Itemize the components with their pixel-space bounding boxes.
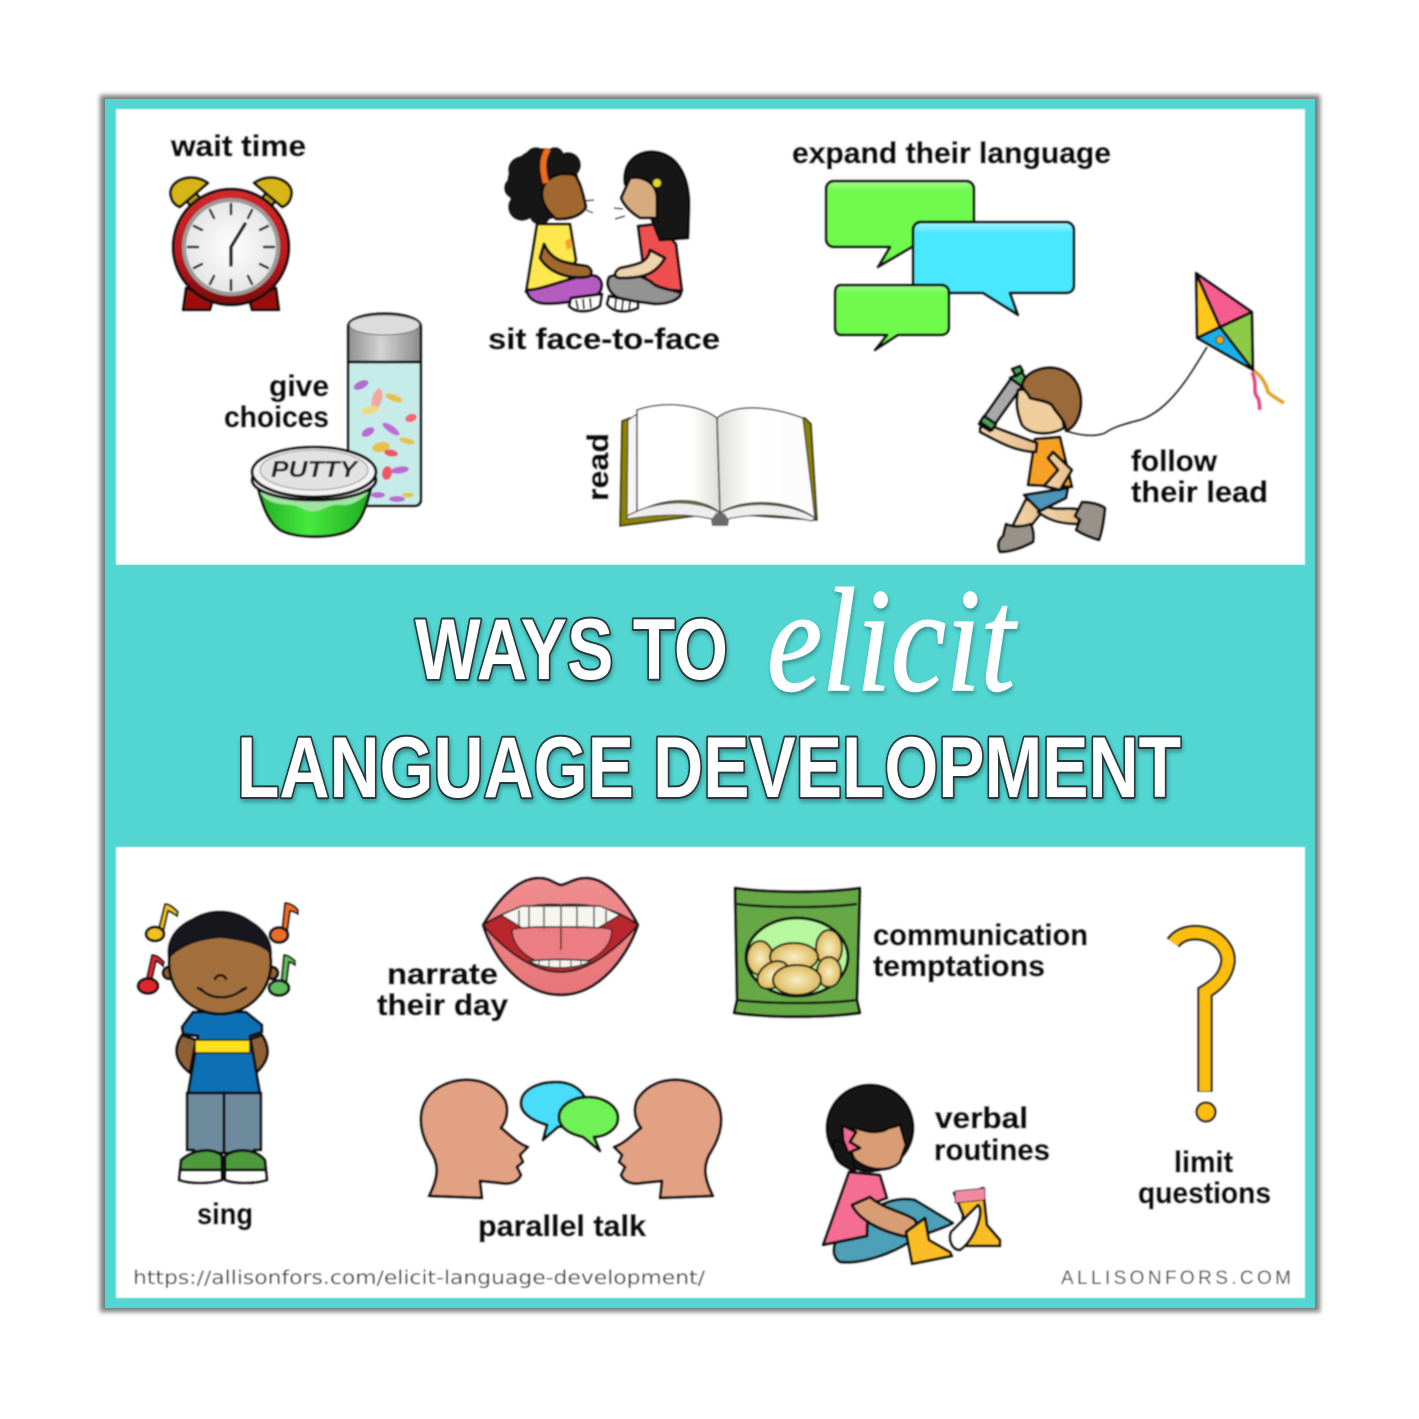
label: wait time: wait time — [170, 130, 306, 163]
label: limit questions: limit — [1174, 1146, 1233, 1179]
icon: bag of chips — [734, 888, 860, 1017]
icon: two girls sitting face to face — [504, 147, 689, 311]
icon: girl putting on boots — [823, 1085, 1000, 1264]
icon: putty tub — [252, 447, 376, 537]
title line: Ways to: WAYS TO — [415, 602, 728, 698]
label: narrate their day: narrate — [387, 958, 498, 991]
icon: kite — [1196, 273, 1284, 410]
panel: top strategies — [116, 109, 1305, 565]
page frame — [100, 95, 1320, 1312]
right girl — [607, 152, 689, 311]
label: communication temptations: communication — [873, 919, 1088, 952]
label: parallel talk: parallel talk — [478, 1210, 646, 1243]
icon: putty tub: PUTTY — [271, 456, 360, 482]
icon: question mark — [1173, 933, 1228, 1122]
label: expand their language: expand their language — [792, 137, 1111, 170]
label: give choices — [224, 370, 329, 434]
label: narrate their day: their day — [377, 989, 508, 1022]
icon: open mouth — [483, 878, 638, 995]
title word: elicit: elicit — [767, 559, 1018, 723]
label: limit questions: questions — [1138, 1177, 1271, 1210]
icon: open book — [620, 405, 817, 526]
label: verbal routines — [934, 1102, 1050, 1167]
label: sit face-to-face: sit face-to-face — [488, 323, 720, 356]
icon: two heads talking — [421, 1080, 721, 1198]
title band — [105, 559, 1315, 847]
label: follow their lead: their lead — [1131, 476, 1268, 509]
label: read: read — [582, 433, 615, 501]
label: sing: sing — [197, 1198, 253, 1231]
kite string — [1066, 347, 1207, 435]
site credit: ALLISONFORS.COM — [1061, 1268, 1291, 1289]
icon: alarm clock — [170, 177, 292, 310]
icon: bead jar — [348, 314, 421, 506]
source url: https://allisonfors.com/elicit-language-development/ — [133, 1268, 706, 1289]
label: narrate their day — [377, 958, 508, 1022]
label: limit questions — [1138, 1146, 1271, 1210]
panel: bottom strategies — [116, 847, 1305, 1298]
label: verbal routines: verbal — [935, 1102, 1028, 1135]
title line: Language Development: LANGUAGE DEVELOPMENT — [237, 720, 1181, 816]
label: follow their lead: follow — [1131, 445, 1218, 478]
label: give choices: give — [269, 370, 329, 403]
left girl — [504, 147, 602, 311]
label: communication temptations — [873, 919, 1088, 983]
icon: boy running with kite — [979, 366, 1105, 552]
label: communication temptations: temptations — [873, 950, 1045, 983]
label: follow their lead — [1131, 445, 1268, 509]
icon: singing boy — [138, 903, 298, 1183]
label: verbal routines: routines — [934, 1134, 1050, 1167]
icon: speech bubbles — [826, 181, 1074, 350]
label: give choices: choices — [224, 401, 329, 434]
